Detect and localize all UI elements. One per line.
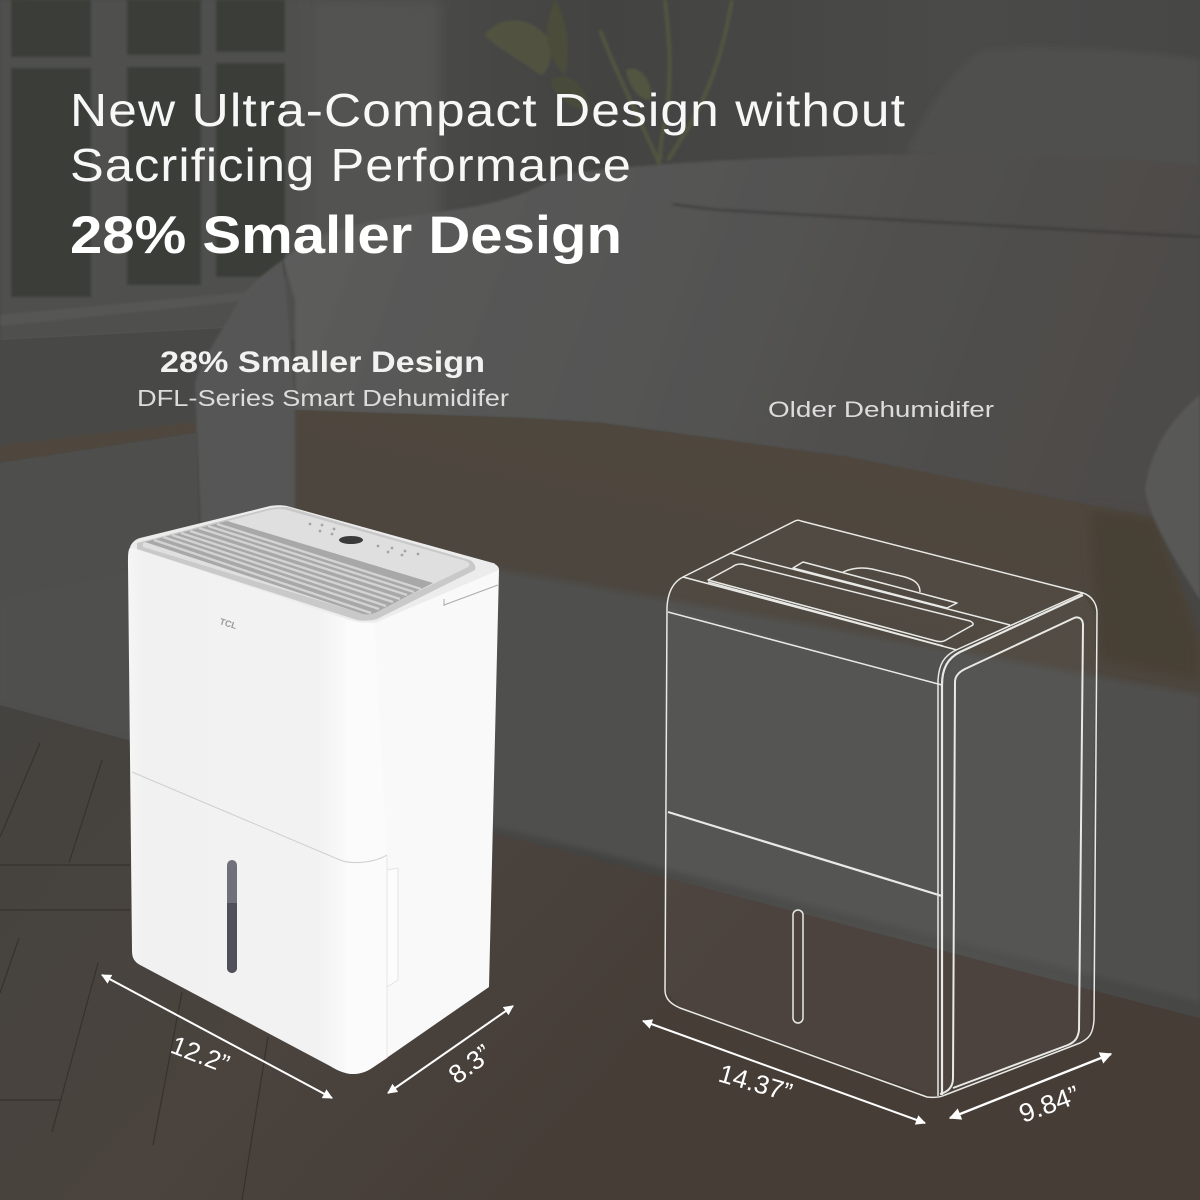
dimension: 9.84: 9.84” (1015, 1079, 1083, 1129)
front corner highlight (345, 620, 387, 1074)
top surface (130, 505, 499, 623)
rear seam (730, 553, 1010, 625)
water window (793, 910, 803, 1023)
label: DFL-series (137, 346, 509, 411)
bed base (0, 560, 1200, 1002)
vent grille (145, 521, 433, 614)
body side (352, 563, 499, 1074)
bed seam (673, 204, 1200, 237)
lower wall (0, 328, 226, 720)
top panel (708, 564, 973, 642)
dimension: 8.3: 8.3” (443, 1038, 497, 1090)
title: New Ultra-Compact Design without (70, 84, 906, 136)
front top line (668, 612, 942, 685)
outer silhouette (665, 520, 1097, 1097)
floor tile lines (0, 743, 268, 1200)
floor (0, 705, 1200, 1200)
pillow (906, 48, 1200, 170)
right blanket (1145, 395, 1200, 600)
side handle recess (387, 868, 398, 987)
baseboard (0, 422, 196, 463)
label: DFL-series: DFL-Series Smart Dehumidifer (137, 385, 509, 411)
top control panel (137, 507, 475, 621)
dimension: 14.37 (643, 1021, 925, 1123)
outline older dehumidifier (665, 520, 1097, 1097)
water window (227, 860, 237, 973)
dimension: 12.2: 12.2” (167, 1030, 234, 1079)
blanket drape (195, 260, 295, 570)
side handle top (444, 585, 498, 606)
corner edges (942, 595, 1083, 1095)
handle (793, 562, 957, 608)
logo: TCL (218, 616, 239, 631)
label: DFL-series: 28% Smaller Design (160, 346, 485, 379)
dimension: 12.2 (102, 975, 332, 1098)
touch buttons (309, 523, 419, 556)
white dehumidifier (128, 505, 499, 1074)
label: older dehumidifier: Older Dehumidifer (768, 397, 995, 422)
arrow (388, 1006, 513, 1093)
arrow (643, 1021, 925, 1123)
arrow (950, 1054, 1111, 1118)
side inner panel (940, 617, 1083, 1094)
plant (484, 0, 732, 165)
curtain (310, 0, 440, 260)
dimension: 9.84 (950, 1054, 1111, 1129)
dimension: 14.37: 14.37” (715, 1058, 796, 1107)
translucent body (665, 595, 1096, 1097)
under-bed brown (200, 410, 1200, 720)
control dial (339, 536, 363, 544)
bed (283, 154, 1200, 560)
dimension: 8.3 (388, 1006, 513, 1093)
tank seam (668, 812, 942, 896)
heading: 28% smaller design: 28% Smaller Design (70, 206, 622, 265)
body front (128, 546, 352, 1074)
tank seam (132, 772, 387, 863)
dark brown right corner (1090, 510, 1200, 680)
arrow (102, 975, 332, 1098)
title (70, 84, 906, 191)
top front edge (683, 577, 957, 650)
window (0, 0, 310, 350)
translucent top (667, 521, 1083, 685)
title: Sacrificing Performance (70, 139, 632, 191)
